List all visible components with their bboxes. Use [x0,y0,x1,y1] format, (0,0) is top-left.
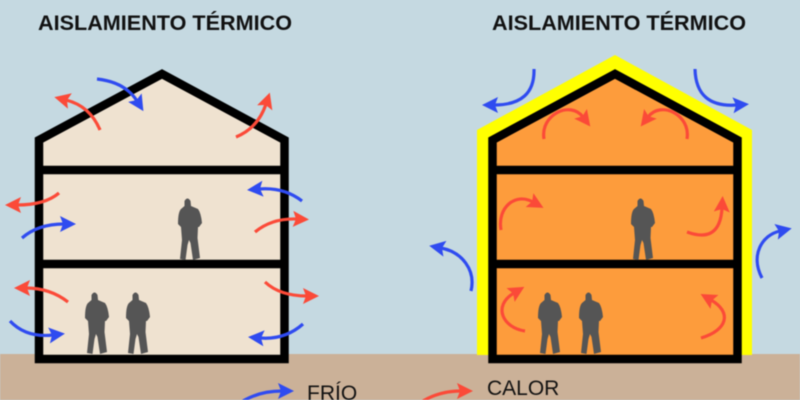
house walls and floors [492,74,738,359]
title: right: AISLAMIENTO TÉRMICO [492,10,746,35]
house without insulation [10,74,307,359]
legend: heat: CALOR [487,377,559,400]
house interior [492,74,738,359]
people [538,198,655,354]
title: left: AISLAMIENTO TÉRMICO [38,10,292,35]
house interior [39,74,284,359]
yellow insulation [477,55,752,355]
house with insulation [441,55,780,359]
people [85,198,202,354]
heat and cold arrows [441,69,780,338]
house walls and floors [39,74,284,359]
heat and cold arrows [10,79,307,338]
legend: heat [423,377,559,400]
legend: cold [243,382,357,400]
ground [0,354,800,400]
